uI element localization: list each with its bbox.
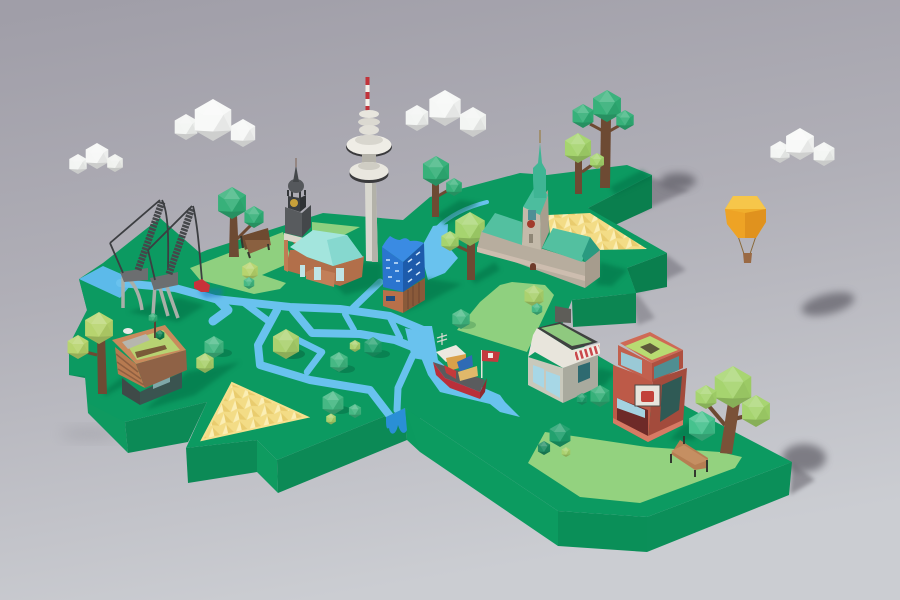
white shop building xyxy=(528,306,600,403)
tree: far left xyxy=(68,312,113,394)
St Michael church xyxy=(284,158,364,287)
small rooftop tree xyxy=(149,313,164,340)
church roof xyxy=(290,230,363,266)
bank sign xyxy=(635,385,660,406)
bench: front right xyxy=(671,436,708,477)
cloud: small left xyxy=(69,143,123,174)
tree: big right xyxy=(696,366,770,454)
hall facade xyxy=(477,230,585,288)
cloud: mid left xyxy=(175,99,255,147)
hall tower xyxy=(522,198,541,250)
island walls xyxy=(69,175,792,552)
island top surface xyxy=(69,165,792,517)
hall right roof xyxy=(542,228,590,262)
TV tower xyxy=(346,77,392,262)
tree: light green by pool xyxy=(441,212,485,280)
large lawn front right xyxy=(528,432,742,503)
crane 2 xyxy=(148,206,202,318)
bench: lawn xyxy=(241,228,271,258)
wood rooftop house xyxy=(112,325,187,405)
lawn behind church xyxy=(312,222,360,237)
field: left yellow pyramids xyxy=(202,383,307,440)
cloud: right xyxy=(770,128,834,166)
river network xyxy=(79,202,520,420)
crane 1 xyxy=(110,200,168,310)
tree: top right large xyxy=(573,90,634,188)
cloud: centre xyxy=(406,90,486,137)
ship flag xyxy=(481,350,500,378)
tree: behind Elbphilharmonie xyxy=(423,156,462,217)
tree: crane lawn xyxy=(218,187,264,257)
hall left roof xyxy=(482,213,522,245)
hot air balloon xyxy=(725,196,766,263)
surface shadows xyxy=(103,170,705,440)
Elbphilharmonie xyxy=(382,236,425,313)
container ship xyxy=(433,333,500,399)
tree: top right light xyxy=(565,133,604,194)
church tower xyxy=(285,158,311,237)
red bank building xyxy=(613,332,687,442)
red cargo box xyxy=(194,279,210,292)
ground shadows xyxy=(60,173,857,495)
central lawn xyxy=(457,282,554,352)
church walls xyxy=(284,233,364,286)
field: right yellow pyramids xyxy=(548,213,647,250)
bushes xyxy=(196,262,715,457)
lawn near crane xyxy=(190,232,292,294)
town hall xyxy=(477,130,600,288)
waterfall xyxy=(386,408,407,434)
